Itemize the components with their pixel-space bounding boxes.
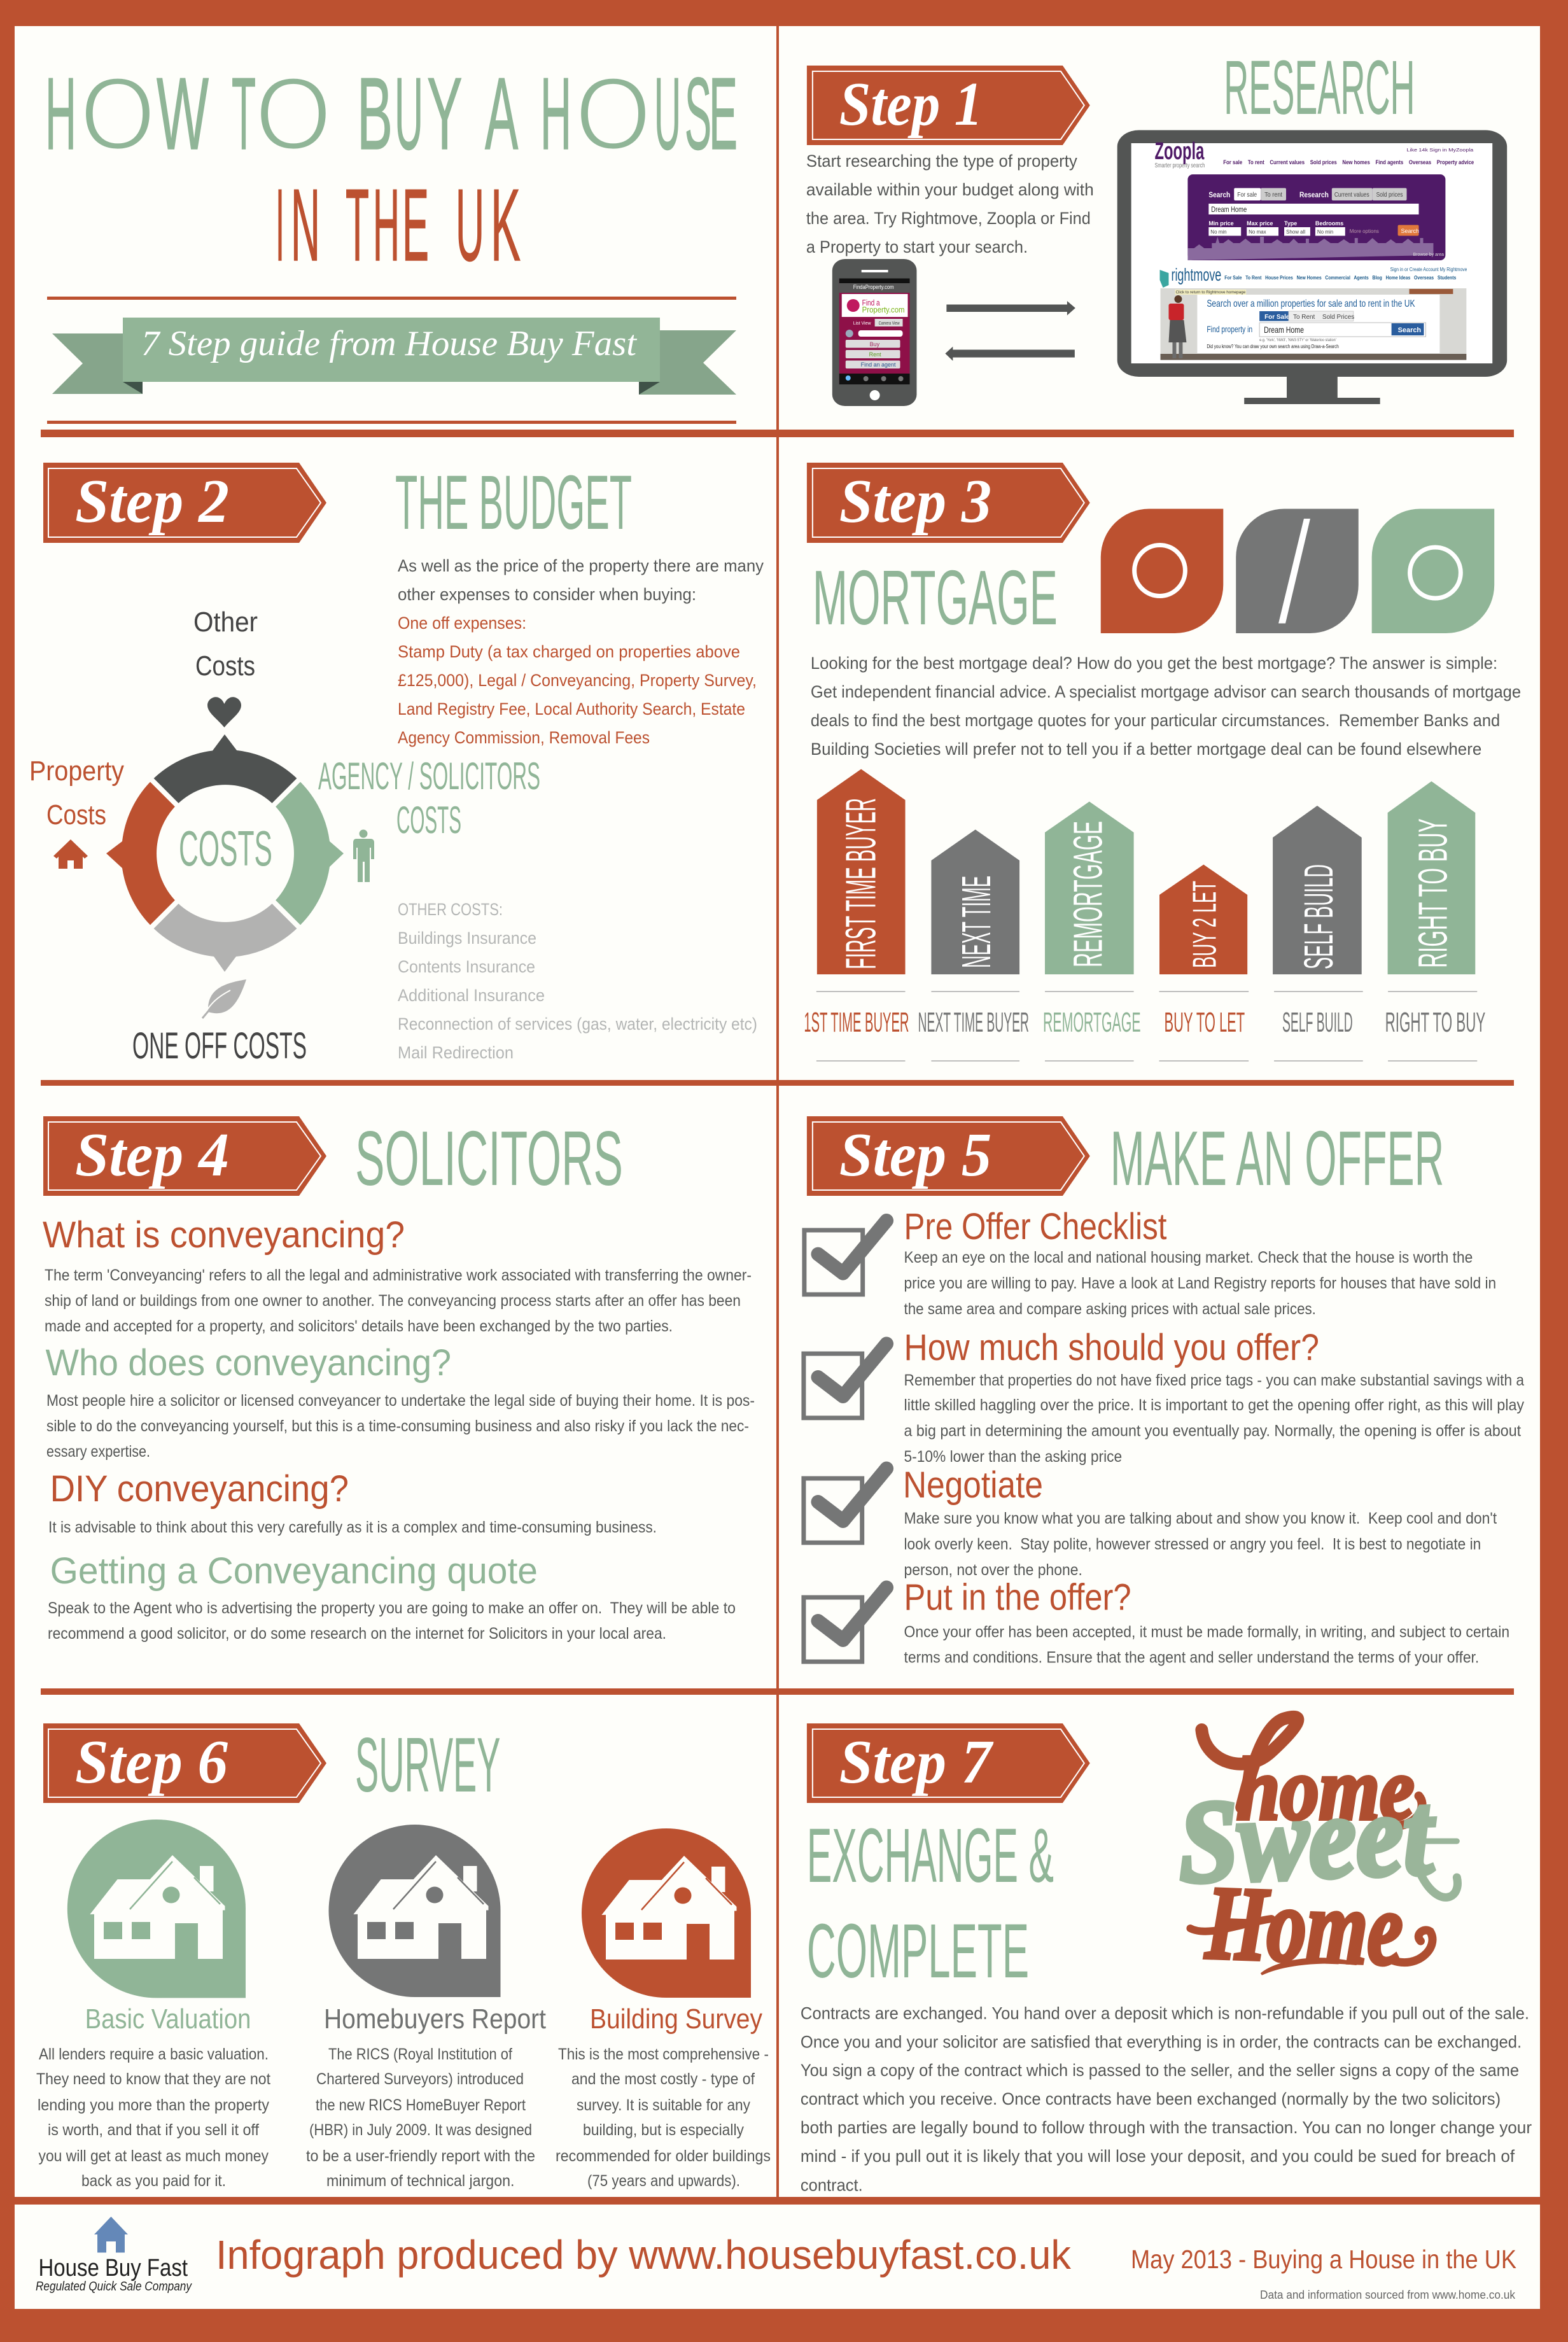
- label: building survey: Building Survey: [590, 2003, 762, 2035]
- icon: checkbox 1: [804, 1221, 886, 1294]
- bar: right to buy: [1388, 782, 1475, 974]
- bar labels: REMORTGAGE: [1043, 1007, 1141, 1038]
- title line 1: W: [157, 57, 209, 171]
- text: basic valuation: [36, 2045, 270, 2190]
- bar: next time: [931, 830, 1019, 974]
- rightmove screenshot: Find property in: [1207, 324, 1252, 334]
- text block: 5-10% lower than the asking price: [904, 1448, 1122, 1466]
- step 6 badge: [43, 1723, 326, 1803]
- step 7 badge: Step 7: [839, 1728, 994, 1797]
- text: homebuyers report: The RICS (Royal Institution of: [328, 2045, 512, 2063]
- text block: [904, 1371, 1525, 1466]
- zoopla screenshot: Like 14k Sign in MyZoopla: [1407, 148, 1473, 153]
- text block: terms and conditions. Ensure that the agent and seller understand the terms of your offer.: [904, 1649, 1479, 1667]
- step 4 badge: Step 4: [75, 1121, 229, 1189]
- label: property costs: Property: [29, 755, 124, 787]
- step 2 badge: [43, 463, 326, 543]
- zoopla screenshot: Max price: [1247, 220, 1273, 227]
- mortgage text: Looking for the best mortgage deal? How do you get the best mortgage? The answer is simple:: [811, 654, 1497, 673]
- icon: checkbox 2: [804, 1344, 886, 1418]
- text block: Once your offer has been accepted, it must be made formally, in writing, and subject to certain: [904, 1623, 1509, 1641]
- zoopla screenshot: Sold prices: [1376, 192, 1403, 199]
- rightmove screenshot: Search: [1398, 326, 1421, 334]
- step 1 badge: Step 1: [839, 70, 983, 139]
- other costs list: [398, 900, 757, 1062]
- step 3 badge: [807, 463, 1090, 543]
- budget intro text: [398, 556, 764, 747]
- bar: first time buyer: FIRST TIME BUYER: [837, 798, 885, 969]
- title line 1: T: [232, 57, 256, 171]
- panel: step 4 solicitors: [43, 1115, 755, 1643]
- rightmove screenshot: Sold Prices: [1322, 314, 1354, 321]
- zoopla screenshot: Smarter property search: [1155, 162, 1205, 169]
- title line 2: I: [276, 168, 284, 283]
- donut centre label: COSTS: [179, 820, 272, 876]
- title line 1: O: [80, 57, 155, 171]
- other costs list: Additional Insurance: [398, 986, 545, 1005]
- panel: step 6 survey: SURVEY: [355, 1721, 500, 1808]
- subheading: diy conveyancing: DIY conveyancing?: [50, 1468, 349, 1510]
- text block: made and accepted for a property, and solicitors' details have been exchanged by the two parties.: [45, 1317, 673, 1335]
- icon: checkbox 3: [804, 1469, 886, 1543]
- title line 2: E: [402, 168, 429, 283]
- label: property costs: Costs: [46, 799, 106, 831]
- icon: phone: FindaProperty.com: [853, 284, 894, 290]
- text block: It is advisable to think about this very carefully as it is a complex and time-consuming business.: [48, 1518, 657, 1536]
- text block: little skilled haggling over the price. It is important to get the opening offer right, as this will play: [904, 1396, 1525, 1414]
- icon: house pin, homebuyers report: [328, 1825, 500, 1997]
- text: building survey: (75 years and upwards).: [587, 2172, 740, 2190]
- title line 1: A: [485, 57, 519, 171]
- text block: [45, 1266, 752, 1335]
- zoopla screenshot: Dream Home: [1211, 205, 1247, 214]
- rightmove screenshot: e.g. 'York', 'NW3', 'NW3 5TY' or 'Waterloo station': [1259, 339, 1336, 342]
- label: other costs: Costs: [195, 650, 255, 682]
- step 7 text: Once you and your solicitor are satisfied that everything is in order, the contracts can be exchanged.: [801, 2032, 1522, 2052]
- zoopla screenshot: [1155, 138, 1474, 260]
- bar: next time: NEXT TIME: [953, 876, 999, 968]
- text block: [46, 1392, 755, 1461]
- text block: price you are willing to pay. Have a look at Land Registry reports for houses that have sold in: [904, 1274, 1496, 1293]
- title line 2: H: [373, 168, 400, 283]
- panel: step 1 research: [806, 45, 1507, 406]
- title line 1: U: [654, 57, 681, 171]
- text block: sible to do the conveyancing yourself, but this is a time-consuming business and also risky if you lack the nec-: [46, 1417, 749, 1435]
- step 7 badge: [807, 1723, 1090, 1803]
- bar labels: BUY TO LET: [1165, 1007, 1245, 1038]
- step 1 text: available within your budget along with: [806, 180, 1094, 199]
- step 1 text: Start researching the type of property: [806, 151, 1077, 171]
- bar: remortgage: [1045, 802, 1134, 974]
- budget intro text: As well as the price of the property there are many: [398, 556, 764, 575]
- zoopla screenshot: No max: [1249, 229, 1266, 235]
- text block: [904, 1510, 1497, 1579]
- heading: exchange and complete: [807, 1813, 1054, 1994]
- step 1 text: [806, 151, 1094, 256]
- step 2 badge: Step 2: [75, 467, 229, 536]
- heading: exchange and complete: COMPLETE: [807, 1908, 1029, 1994]
- arrow: to phone: [945, 347, 1075, 361]
- footer date: May 2013 - Buying a House in the UK: [1131, 2245, 1516, 2274]
- bar labels: SELF BUILD: [1282, 1007, 1353, 1038]
- bar: remortgage: REMORTGAGE: [1065, 821, 1111, 967]
- budget intro text: Stamp Duty (a tax charged on properties above: [398, 642, 740, 661]
- budget intro text: Agency Commission, Removal Fees: [398, 728, 650, 747]
- text block: look overly keen. Stay polite, however stressed or angry you feel. It is best to negotiate in: [904, 1536, 1481, 1553]
- text block: person, not over the phone.: [904, 1561, 1082, 1579]
- subheading: negotiate: Negotiate: [903, 1465, 1043, 1506]
- title line 1: O: [255, 57, 332, 171]
- other costs list: Buildings Insurance: [398, 929, 536, 948]
- panel: step 2 the budget: THE BUDGET: [395, 459, 632, 545]
- step 1 text: the area. Try Rightmove, Zoopla or Find: [806, 209, 1091, 228]
- label: agency / solicitors costs: [318, 755, 540, 841]
- bar: self build: [1273, 806, 1362, 974]
- text block: a big part in determining the amount you eventually pay. Normally, the opening is offer is about: [904, 1422, 1521, 1440]
- panel: step 3 mortgage: [804, 463, 1521, 1061]
- arrow: to monitor: [946, 301, 1075, 316]
- text block: Remember that properties do not have fixed price tags - you can make substantial savings with a: [904, 1371, 1524, 1389]
- text: homebuyers report: the new RICS HomeBuyer Report: [316, 2096, 526, 2114]
- text block: Keep an eye on the local and national housing market. Check that the house is worth the: [904, 1249, 1473, 1266]
- text block: Make sure you know what you are talking about and show you know it. Keep cool and don't: [904, 1510, 1497, 1527]
- rightmove screenshot: Dream Home: [1264, 325, 1304, 335]
- house buy fast logo: Regulated Quick Sale Company: [36, 2280, 192, 2294]
- mortgage text: Building Societies will prefer not to tell you if a better mortgage deal can be found elsewhere: [811, 740, 1481, 759]
- zoopla screenshot: Type: [1284, 220, 1297, 227]
- rightmove screenshot: rightmove: [1171, 265, 1221, 284]
- text: homebuyers report: Chartered Surveyors) introduced: [316, 2070, 524, 2088]
- mortgage text: deals to find the best mortgage quotes for your particular circumstances. Remember Banks and: [811, 711, 1500, 730]
- segment: agency costs: [276, 782, 344, 925]
- text block: [904, 1249, 1496, 1318]
- zoopla screenshot: Browse by area: [1413, 253, 1444, 257]
- step 3 badge: Step 3: [839, 467, 991, 536]
- bar: buy 2 let: [1159, 864, 1247, 974]
- step 5 badge: [807, 1116, 1090, 1196]
- zoopla screenshot: Search: [1401, 228, 1419, 234]
- icon: phone: Camera View: [879, 321, 900, 326]
- step 7 text: contract.: [801, 2175, 863, 2195]
- house bar chart: mortgage types: [817, 769, 1475, 974]
- panel: step 2 the budget: [29, 459, 764, 1067]
- text block: Speak to the Agent who is advertising the property you are going to make an offer on. They will be able to: [48, 1599, 736, 1617]
- title line 1: H: [45, 57, 76, 171]
- zoopla screenshot: Search: [1208, 190, 1230, 199]
- bar: right to buy: RIGHT TO BUY: [1410, 818, 1455, 968]
- text block: Most people hire a solicitor or licensed conveyancer to undertake the legal side of buying their home. It is pos-: [46, 1392, 755, 1410]
- step 5 badge: Step 5: [839, 1121, 991, 1189]
- mortgage text: [811, 654, 1521, 759]
- label: other costs: [193, 607, 258, 682]
- step 7 text: [801, 2004, 1532, 2195]
- text: basic valuation: is worth, and that if you sell it off: [48, 2121, 259, 2139]
- segment: other costs: [154, 734, 297, 803]
- subheading: getting a quote: Getting a Conveyancing quote: [50, 1550, 538, 1592]
- zoopla screenshot: For sale To rent Current values Sold prices New homes Find agents Overseas Property advice: [1223, 159, 1474, 165]
- step 7 text: both parties are legally bound to follow through with the transaction. You can no longer change your: [801, 2118, 1532, 2137]
- subheading: how much should you offer: How much should you offer?: [904, 1328, 1319, 1368]
- title line 1: B: [357, 57, 393, 171]
- icon: leaf: [202, 979, 246, 1018]
- zoopla screenshot: Min price: [1208, 220, 1234, 227]
- text: homebuyers report: (HBR) in July 2009. It was designed: [309, 2121, 532, 2139]
- title line 1: U: [395, 57, 423, 171]
- ribbon banner: 7 Step guide from House Buy Fast: [141, 324, 637, 363]
- icon: house pin, basic valuation: [67, 1820, 246, 1998]
- zoopla screenshot: Show all: [1286, 229, 1305, 235]
- icon: person: [353, 830, 374, 882]
- bar labels: 1ST TIME BUYER: [804, 1007, 909, 1038]
- icon: phone: Buy: [870, 341, 880, 347]
- rightmove screenshot: Search over a million properties for sale and to rent in the UK: [1207, 298, 1415, 309]
- rightmove screenshot: Sign in or Create Account My Rightmove: [1390, 267, 1467, 272]
- lettering: home sweet home: Home: [1203, 1864, 1405, 1988]
- panel: footer: [36, 2217, 1516, 2301]
- title line 1: O: [575, 57, 651, 171]
- text: basic valuation: All lenders require a basic valuation.: [39, 2045, 269, 2063]
- zoopla screenshot: Zoopla: [1155, 138, 1205, 165]
- zoopla screenshot: No min: [1210, 229, 1227, 235]
- infographic page: E: [709, 57, 738, 171]
- other costs list: OTHER COSTS:: [398, 900, 503, 919]
- rightmove screenshot: Did you know? You can draw your own search area using Draw-a-Search: [1207, 344, 1339, 349]
- ribbon banner: [52, 318, 736, 395]
- zoopla screenshot: To rent: [1264, 192, 1282, 199]
- other costs list: Mail Redirection: [398, 1043, 514, 1062]
- subheading: put in the offer: Put in the offer?: [904, 1577, 1131, 1618]
- panel: step 6 survey: [36, 1721, 771, 2190]
- text: homebuyers report: [306, 2045, 535, 2190]
- step 4 badge: [43, 1116, 326, 1196]
- title line 2: U: [456, 168, 484, 283]
- text: basic valuation: lending you more than the property: [38, 2096, 269, 2114]
- house buy fast logo: [36, 2217, 192, 2294]
- icon: phone: [832, 259, 916, 406]
- icon: phone: Rent: [869, 351, 881, 358]
- zoopla screenshot: Bedrooms: [1315, 220, 1343, 227]
- panel: step 7 exchange and complete: [801, 1717, 1532, 2195]
- donut chart: costs: [106, 734, 344, 972]
- text: building survey: This is the most comprehensive -: [558, 2045, 769, 2063]
- title line 1: S: [685, 57, 711, 171]
- bar labels: NEXT TIME BUYER: [918, 1007, 1029, 1038]
- rightmove screenshot: Click to return to Rightmove homepage: [1175, 291, 1246, 295]
- mortgage text: Get independent financial advice. A specialist mortgage advisor can search thousands of mortgage: [811, 682, 1521, 701]
- title line 1: Y: [427, 57, 461, 171]
- lettering: home sweet home: Sweet: [1177, 1768, 1438, 1907]
- heading: mortgage: MORTGAGE: [813, 554, 1058, 641]
- zoopla screenshot: No min: [1317, 229, 1333, 235]
- budget intro text: Land Registry Fee, Local Authority Search, Estate: [398, 699, 745, 719]
- budget intro text: other expenses to consider when buying:: [398, 585, 696, 604]
- title line 2: T: [346, 168, 369, 283]
- panel: title: K: [491, 168, 521, 283]
- text: building survey: [556, 2045, 771, 2190]
- subheading: what is conveyancing: What is conveyancing?: [43, 1214, 405, 1256]
- subheading: pre offer checklist: Pre Offer Checklist: [904, 1207, 1166, 1247]
- text block: recommend a good solicitor, or do some research on the internet for Solicitors in your local area.: [48, 1625, 666, 1643]
- step 7 text: You sign a copy of the contract which is passed to the seller, and the seller signs a copy of the same: [801, 2061, 1519, 2080]
- other costs list: Contents Insurance: [398, 957, 535, 976]
- zoopla screenshot: Current values: [1334, 192, 1369, 199]
- label: homebuyers report: Homebuyers Report: [324, 2003, 546, 2035]
- icon: house: [53, 839, 88, 869]
- step 1 badge: [807, 66, 1090, 145]
- icon: phone: Find a: [862, 298, 880, 307]
- text: building survey: recommended for older buildings: [556, 2147, 771, 2165]
- footer source: Data and information sourced from www.home.co.uk: [1260, 2289, 1516, 2301]
- segment: one off costs: [154, 904, 297, 972]
- zoopla screenshot: Research: [1299, 190, 1329, 199]
- step 1 text: a Property to start your search.: [806, 237, 1028, 256]
- lettering: home sweet home: [1177, 1717, 1457, 1988]
- text block: [48, 1599, 736, 1643]
- label: property costs: [29, 755, 124, 831]
- lettering: home sweet home: home: [1236, 1740, 1415, 1839]
- bar: self build: SELF BUILD: [1296, 864, 1341, 969]
- label: agency / solicitors costs: COSTS: [396, 799, 461, 841]
- icon: phone: Find an agent: [861, 361, 896, 368]
- text block: The term 'Conveyancing' refers to all the legal and administrative work associated with transferring the owner-: [45, 1266, 752, 1284]
- icon: phone: List View: [853, 321, 871, 326]
- panel: step 5 make an offer: [804, 1115, 1525, 1667]
- icon: phone: Property.com: [862, 305, 905, 314]
- text block: essary expertise.: [46, 1443, 150, 1461]
- text block: [904, 1623, 1509, 1667]
- other costs list: Reconnection of services (gas, water, electricity etc): [398, 1014, 757, 1034]
- heading: solicitors: SOLICITORS: [355, 1115, 623, 1202]
- rightmove screenshot: [1160, 265, 1467, 360]
- icon: heart: [207, 697, 241, 727]
- subheading: who does conveyancing: Who does conveyancing?: [46, 1342, 451, 1384]
- icon: monitor with websites: [1117, 130, 1507, 404]
- label: basic valuation: Basic Valuation: [85, 2003, 251, 2035]
- label: one off costs: ONE OFF COSTS: [132, 1025, 307, 1067]
- budget intro text: £125,000), Legal / Conveyancing, Property Survey,: [398, 671, 757, 690]
- step 7 text: contract which you receive. Once contracts have been exchanged (normally by the two solicitors): [801, 2089, 1501, 2108]
- step 6 badge: Step 6: [75, 1728, 228, 1797]
- icon: checkbox 4: [804, 1587, 886, 1662]
- text: building survey: and the most costly - type of: [571, 2070, 755, 2088]
- text: basic valuation: you will get at least as much money: [38, 2147, 269, 2165]
- segment: property costs: [106, 782, 175, 925]
- panel: step 7 exchange and complete: EXCHANGE &: [807, 1813, 1054, 1898]
- bar labels: [804, 1007, 1485, 1038]
- panel: title: [45, 57, 738, 424]
- label: other costs: Other: [193, 607, 258, 638]
- rightmove screenshot: To Rent: [1293, 314, 1315, 321]
- text: homebuyers report: to be a user-friendly report with the: [306, 2147, 535, 2165]
- icon: house pin, building survey: [582, 1828, 751, 1998]
- text: basic valuation: back as you paid for it.: [81, 2172, 226, 2190]
- step 7 text: Contracts are exchanged. You hand over a deposit which is non-refundable if you pull out of the sale.: [801, 2004, 1529, 2023]
- house buy fast logo: House Buy Fast: [38, 2255, 188, 2282]
- text block: the same area and compare asking prices with actual sale prices.: [904, 1300, 1316, 1318]
- bar: first time buyer: [817, 769, 906, 974]
- text block: ship of land or buildings from one owner to another. The conveyancing process starts after an offer has been: [45, 1292, 741, 1310]
- rightmove screenshot: For Sale: [1264, 314, 1290, 321]
- rightmove screenshot: For Sale To Rent House Prices New Homes Commercial Agents Blog Home Ideas Overseas Students: [1224, 275, 1457, 281]
- label: agency / solicitors costs: AGENCY / SOLICITORS: [318, 755, 540, 797]
- text: building survey: building, but is especially: [583, 2121, 744, 2139]
- step 7 text: mind - if you pull out it is likely that you will lose your deposit, and you could be sued for breach of: [801, 2147, 1515, 2166]
- text: homebuyers report: minimum of technical jargon.: [326, 2172, 514, 2190]
- title line 2: N: [291, 168, 320, 283]
- footer headline: Infograph produced by www.housebuyfast.co.uk: [216, 2232, 1072, 2278]
- budget intro text: One off expenses:: [398, 614, 526, 633]
- zoopla screenshot: More options: [1350, 228, 1379, 234]
- title line 1: H: [540, 57, 571, 171]
- text: basic valuation: They need to know that they are not: [36, 2070, 270, 2088]
- icon: percent tiles: [1101, 508, 1494, 633]
- zoopla screenshot: For sale: [1237, 192, 1257, 199]
- text: building survey: survey. It is suitable for any: [577, 2096, 750, 2114]
- bar: buy 2 let: BUY 2 LET: [1186, 881, 1223, 968]
